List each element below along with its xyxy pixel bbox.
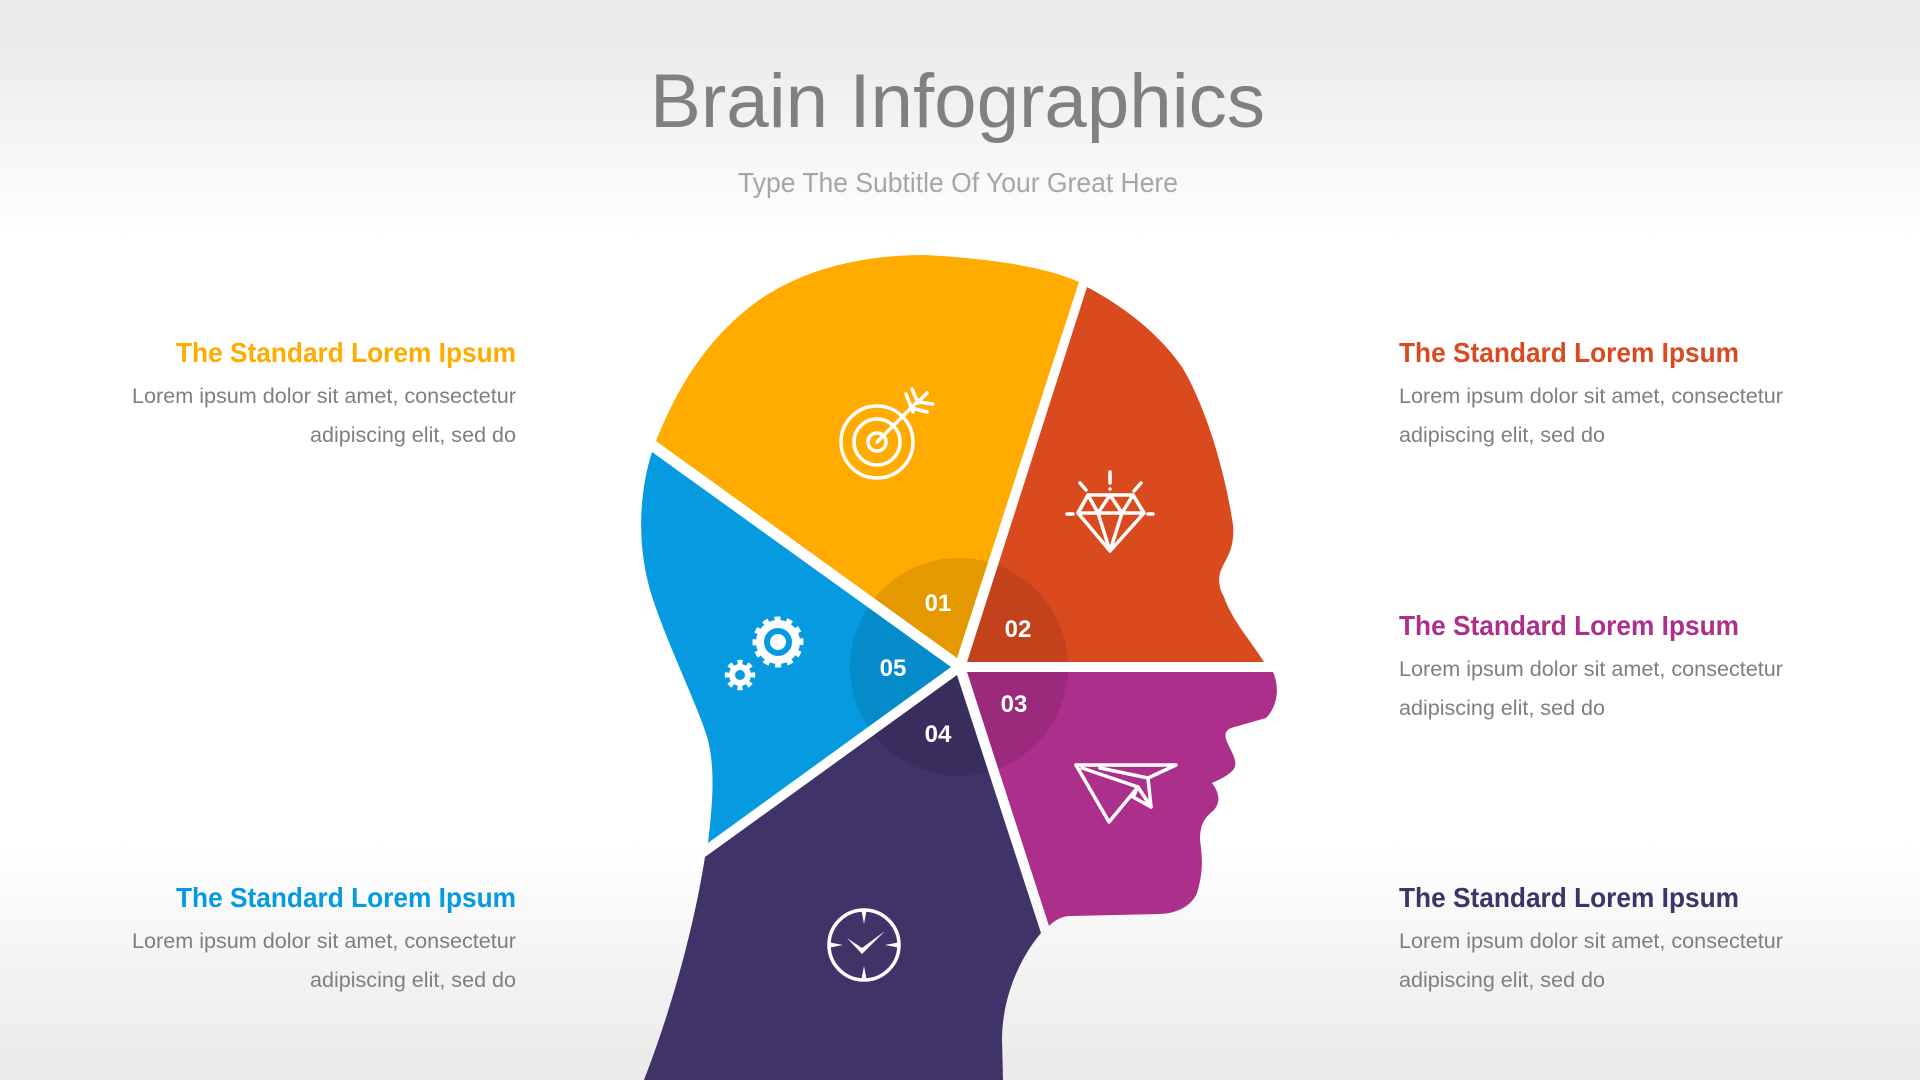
text block: right top (1399, 337, 1783, 447)
text block: right bottom: The Standard Lorem Ipsum (1399, 882, 1739, 913)
subtitle: Type The Subtitle Of Your Great Here (738, 167, 1178, 198)
text block: right middle: The Standard Lorem Ipsum (1399, 610, 1739, 641)
text block: left bottom: Lorem ipsum dolor sit amet, consectetur (132, 930, 516, 953)
number 02: 02 (1005, 616, 1031, 643)
text block: left top: The Standard Lorem Ipsum (176, 337, 516, 368)
number 04: 04 (925, 721, 952, 748)
head diagram (641, 255, 1277, 1080)
text block: right middle: adipiscing elit, sed do (1399, 697, 1605, 720)
icon: diamond (1067, 472, 1153, 551)
text block: right middle: Lorem ipsum dolor sit amet, consectetur (1399, 658, 1783, 681)
text block: right bottom: Lorem ipsum dolor sit amet, consectetur (1399, 930, 1783, 953)
text block: left top: adipiscing elit, sed do (310, 424, 516, 447)
icon: clock (829, 910, 899, 980)
text block: right bottom (1399, 882, 1783, 992)
text block: right top: adipiscing elit, sed do (1399, 424, 1605, 447)
text block: right bottom: adipiscing elit, sed do (1399, 969, 1605, 992)
icon: gears (727, 619, 801, 688)
text block: left top (132, 337, 516, 447)
segment 04: navy (644, 675, 1041, 1080)
number 03: 03 (1001, 691, 1027, 718)
number 05: 05 (880, 655, 906, 682)
text block: right top: Lorem ipsum dolor sit amet, consectetur (1399, 385, 1783, 408)
icon: target with arrow (841, 389, 933, 478)
segment 05: blue (641, 452, 951, 843)
text block: left bottom: adipiscing elit, sed do (310, 969, 516, 992)
text block: right middle (1399, 610, 1783, 720)
text block: left bottom (132, 882, 516, 992)
text block: left bottom: The Standard Lorem Ipsum (176, 882, 516, 913)
text block: right top: The Standard Lorem Ipsum (1399, 337, 1739, 368)
number 01: 01 (925, 590, 951, 617)
segment 03: magenta (967, 672, 1277, 926)
title: Brain Infographics (650, 59, 1265, 144)
text block: left top: Lorem ipsum dolor sit amet, consectetur (132, 385, 516, 408)
icon: paper plane (1076, 765, 1176, 822)
segment 02: orange (967, 287, 1264, 662)
central dark circle (850, 558, 1068, 776)
segment 01: yellow (656, 255, 1079, 658)
